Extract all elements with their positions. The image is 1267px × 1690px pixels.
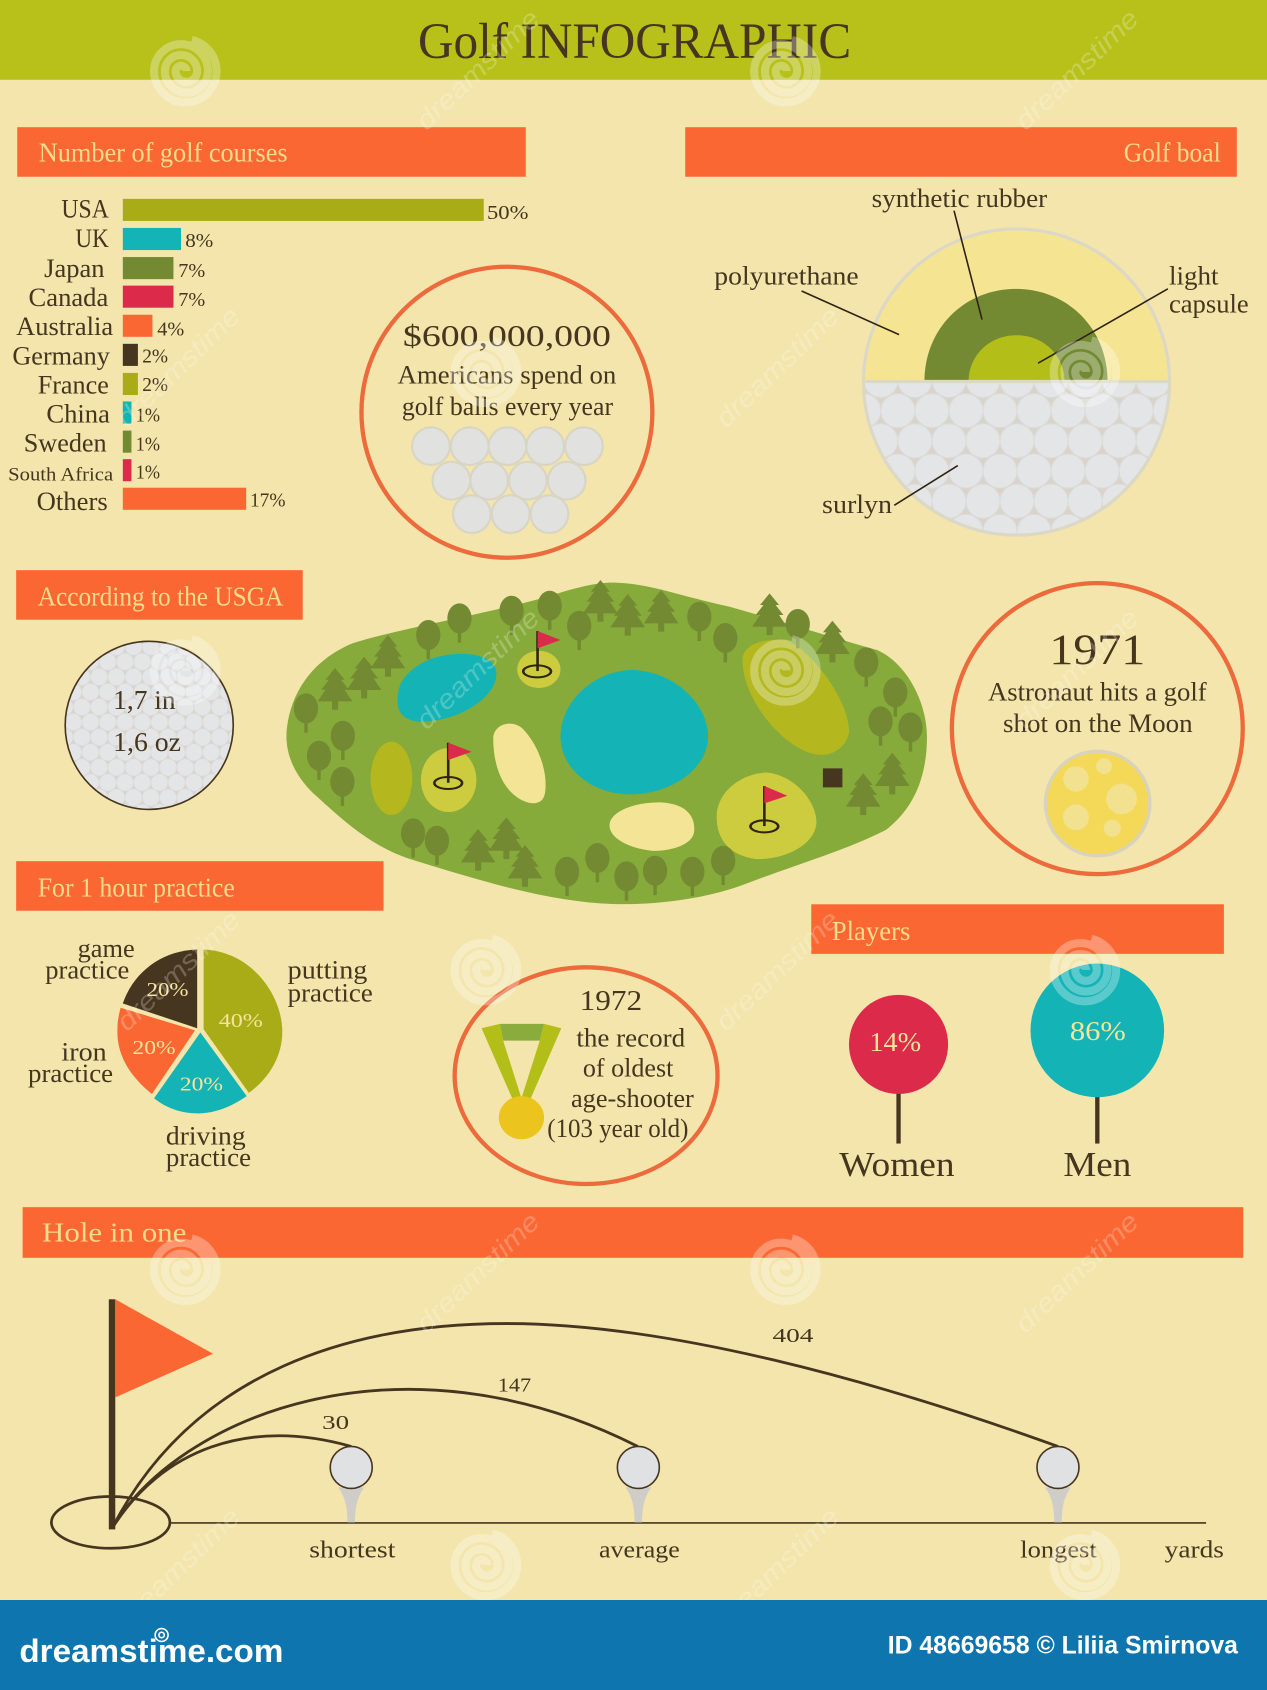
watermark layer: dreamstime: [1009, 603, 1145, 735]
chart: women share: Women: [839, 1146, 955, 1184]
callout: 1972 oldest age-shooter: of oldest: [583, 1054, 674, 1083]
bar chart: 7%: [178, 289, 205, 311]
icon: pile of golf balls: [412, 427, 603, 533]
pie chart: iron: [61, 1038, 107, 1067]
icon: ball on tee, shortest: [309, 1412, 396, 1563]
heading: for 1 hour practice: For 1 hour practice: [38, 873, 235, 903]
pie chart: 20%: [133, 1037, 176, 1059]
bar chart: France: [38, 370, 109, 399]
panel: players: [811, 904, 1224, 1184]
heading: according to the USGA: According to the USGA: [38, 582, 284, 612]
footer band: dreamstime.com: [19, 1633, 283, 1669]
icon: flag one: [523, 631, 561, 677]
bar chart: Germany: [12, 341, 110, 370]
chart: men share: Men: [1063, 1146, 1131, 1184]
bar chart: [8, 195, 528, 516]
header band with title: [0, 0, 1267, 80]
callout: money spent on golf balls: [361, 267, 652, 558]
icon: ball on tee, average: average: [599, 1536, 680, 1563]
bar chart: Sweden: [24, 429, 107, 458]
callout: money spent on golf balls: $600,000,000: [403, 319, 611, 353]
icon: ball on tee, longest: 404: [772, 1325, 813, 1347]
footer band: [0, 1600, 1267, 1690]
bar chart: 17%: [250, 490, 286, 512]
bar chart: Japan: [44, 254, 105, 283]
watermark layer: dreamstime: [110, 1502, 246, 1634]
icon: regulation ball: 1,6 oz: [113, 727, 181, 757]
icon: ball on tee, longest: [772, 1325, 1097, 1563]
pie chart: game: [78, 934, 135, 963]
diagram: ball layers: surlyn: [822, 490, 892, 519]
heading: players: Players: [832, 916, 910, 946]
heading: according to the USGA: [16, 570, 303, 620]
diagram: ball layers: synthetic rubber: [872, 184, 1048, 213]
callout: 1971 moon shot: 1971: [1049, 627, 1145, 674]
chart: women share: 14%: [869, 1027, 921, 1057]
heading: players: [811, 904, 1224, 954]
chart: men share: [1031, 964, 1164, 1184]
callout: 1972 oldest age-shooter: 1972: [580, 986, 642, 1017]
header band with title: Golf INFOGRAPHIC: [418, 13, 851, 69]
watermark layer: dreamstime: [709, 301, 845, 433]
bar chart: 4%: [157, 319, 184, 341]
callout: 1971 moon shot: Astronaut hits a golf: [988, 678, 1207, 707]
bar chart: 7%: [178, 260, 205, 282]
bar chart: 2%: [142, 346, 168, 368]
panel: hole in one: [23, 1207, 1243, 1563]
watermark layer: dreamstime: [410, 603, 546, 735]
diagram: ball layers: capsule: [1169, 290, 1249, 319]
watermark layer: dreamstime: [709, 904, 845, 1037]
callout: 1972 oldest age-shooter: age-shooter: [571, 1084, 694, 1113]
pie chart: practice: [28, 1059, 113, 1088]
watermark layer: dreamstime: [110, 904, 246, 1037]
panel: 1 hour practice: [16, 861, 384, 1172]
bar chart: 1%: [136, 434, 160, 456]
panel: number of golf courses: [8, 127, 528, 516]
heading: for 1 hour practice: [16, 861, 384, 911]
callout: 1971 moon shot: shot on the Moon: [1003, 709, 1193, 738]
diagram: ball layers: polyurethane: [714, 262, 859, 291]
diagram: ball layers: [714, 184, 1249, 535]
icon: flag two: [434, 743, 472, 789]
callout: 1972 oldest age-shooter: [455, 967, 718, 1184]
illustration: golf course map: [286, 580, 927, 904]
watermark layer: dreamstime: [410, 3, 546, 136]
icon: ball on tee, longest: longest: [1020, 1536, 1097, 1563]
chart: men share: 86%: [1070, 1016, 1126, 1046]
pie chart: 20%: [147, 979, 189, 1001]
callout: money spent on golf balls: Americans spend on: [398, 361, 616, 390]
watermark layer: dreamstime: [709, 1502, 845, 1634]
watermark layer: dreamstime: [1009, 3, 1145, 136]
axis unit label: yards: [1165, 1536, 1224, 1563]
pie chart: practice: [45, 956, 129, 985]
watermark layer: dreamstime: [410, 1206, 546, 1339]
pie chart: [28, 934, 373, 1172]
icon: flag three: [750, 786, 787, 832]
pie chart: practice: [288, 978, 373, 1007]
axis line: [169, 1522, 1206, 1524]
bar chart: 1%: [136, 462, 160, 484]
callout: 1972 oldest age-shooter: (103 year old): [547, 1114, 688, 1143]
pie chart: putting: [288, 956, 367, 985]
bar chart: South Africa: [8, 465, 114, 486]
icon: regulation ball: [65, 641, 233, 809]
icon: ball on tee, average: [498, 1374, 680, 1563]
bar chart: 1%: [136, 404, 160, 426]
bar chart: USA: [61, 195, 109, 224]
icon: ball on tee, shortest: 30: [322, 1412, 349, 1434]
pie chart: practice: [166, 1143, 251, 1172]
icon: regulation ball: 1,7 in: [113, 685, 176, 715]
bar chart: 2%: [142, 374, 168, 396]
diagram: ball layers: light: [1169, 262, 1219, 291]
pie chart: driving: [166, 1122, 246, 1151]
bar chart: 8%: [185, 230, 213, 252]
heading: hole in one: [23, 1207, 1243, 1258]
watermark layer: [110, 3, 1145, 1634]
bar chart: Canada: [29, 283, 109, 312]
pie chart: 20%: [180, 1074, 223, 1096]
bar chart: China: [46, 399, 110, 429]
bar chart: Others: [37, 487, 108, 516]
watermark layer: dreamstime: [110, 301, 246, 433]
callout: 1972 oldest age-shooter: the record: [576, 1024, 685, 1053]
chart: women share: [839, 995, 955, 1184]
bar chart: 50%: [487, 202, 528, 224]
icon: ball on tee, average: 147: [498, 1374, 531, 1396]
heading: golf boal: Golf boal: [1124, 138, 1221, 168]
heading: number of golf courses: Number of golf courses: [39, 138, 288, 168]
heading: hole in one: Hole in one: [42, 1218, 186, 1248]
icon: flag in hole: [51, 1299, 213, 1548]
icon: ball on tee, shortest: shortest: [309, 1536, 396, 1563]
watermark layer: dreamstime: [1009, 1206, 1145, 1339]
pie chart: 40%: [219, 1010, 263, 1032]
bar chart: Australia: [16, 312, 114, 341]
footer band: ID 48669658 © Liliia Smirnova: [888, 1632, 1238, 1659]
icon: moon: [1045, 751, 1150, 856]
heading: number of golf courses: [17, 127, 526, 177]
panel: golf ball cross-section: [685, 127, 1249, 535]
icon: medal: [482, 1024, 561, 1139]
callout: 1971 moon shot: [952, 583, 1243, 874]
callout: money spent on golf balls: golf balls every year: [402, 392, 613, 421]
icon: footer logo spiral: [155, 1629, 168, 1641]
panel: according to the USGA: [16, 570, 303, 809]
heading: golf boal: [685, 127, 1237, 177]
shot arcs: [112, 1324, 1058, 1528]
bar chart: UK: [75, 224, 109, 253]
